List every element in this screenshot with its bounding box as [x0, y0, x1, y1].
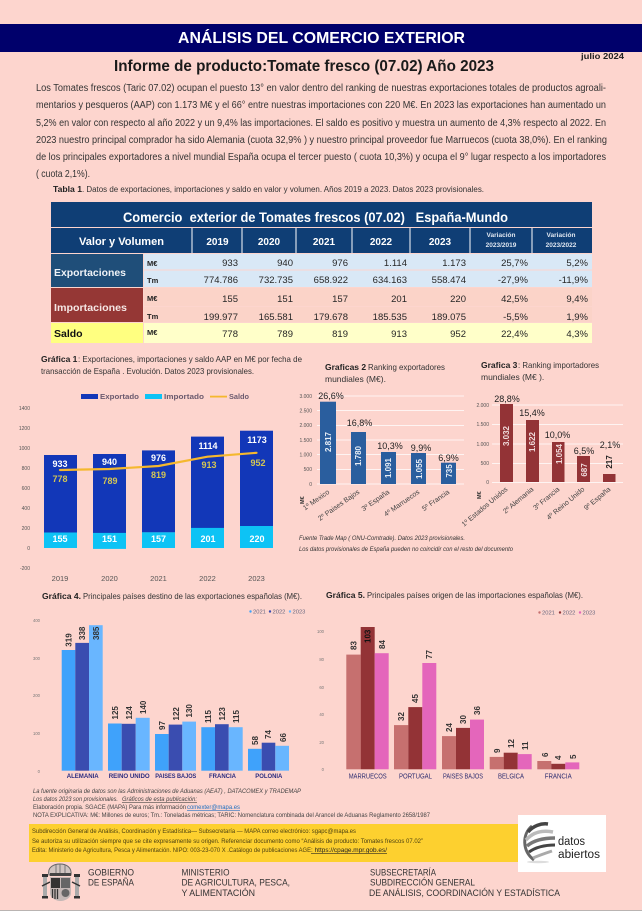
row: importaciones: 157 [332, 294, 348, 305]
row: exportaciones: 658.922 [314, 275, 348, 286]
chart 3 heading [481, 360, 599, 382]
y axis: 20 [319, 740, 325, 745]
bar values: 155 [52, 534, 68, 544]
row: importaciones: 165.581 [259, 312, 293, 323]
country labels: MARRUECOS [349, 774, 387, 780]
country labels: 9º España [583, 486, 612, 512]
footer: undersecretariat: DE ANÁLISIS, COORDINACIÓN Y ESTADÍSTICA [369, 888, 560, 898]
legend: 2022 [272, 610, 285, 616]
bar values [52, 435, 267, 544]
y axis: 80 [319, 657, 325, 662]
row: exportaciones: 933 [222, 258, 238, 269]
row: saldo: 4,3% [566, 329, 589, 340]
footer: government of Spain: DE ESPAÑA [88, 878, 134, 888]
grid and axis [476, 403, 623, 486]
exported bars [44, 431, 273, 533]
table column headers: 2020 [258, 237, 281, 248]
y axis: 200 [22, 526, 30, 532]
y axis: 300 [33, 656, 41, 661]
y axis: 60 [319, 685, 325, 690]
y axis: 1400 [19, 406, 30, 412]
table column headers: Variación [487, 232, 515, 239]
legend [249, 610, 305, 616]
legend: 2021 [542, 610, 555, 616]
bar values: 789 [102, 476, 118, 486]
country labels: 4º Reino Unido [546, 486, 586, 522]
header band with title [0, 24, 642, 52]
footer: government of Spain [88, 868, 134, 888]
row: exportaciones: 774.786 [204, 275, 238, 286]
chart 1 heading: transacción de España . Evolución. Datos 2023 provisionales. [41, 366, 254, 376]
table column headers: 2023/2019 [486, 242, 517, 249]
bars 2023 [89, 625, 289, 771]
table column headers: Valor y Volumen [79, 236, 164, 248]
icon: coat of arms of Spain [42, 864, 80, 901]
y axis: 800 [22, 466, 30, 472]
country labels: REINO UNIDO [109, 773, 150, 780]
country labels: 1º Mexico [302, 489, 331, 512]
country labels: PAISES BAJOS [155, 773, 197, 780]
y axis: 0 [38, 769, 41, 774]
row: importaciones: Tm [147, 312, 159, 321]
legend [538, 610, 595, 616]
footer: undersecretariat: SUBDIRECCIÓN GENERAL [370, 878, 475, 888]
table column headers: 2023/2022 [546, 242, 577, 249]
chart 4 heading: Principales países destino de las exportaciones españolas (M€). [83, 591, 302, 601]
datos abiertos logo [518, 815, 606, 872]
row: saldo [51, 323, 592, 343]
bar values: 4 [554, 755, 563, 760]
yellow contact band [29, 824, 518, 862]
legend: Importado [164, 392, 204, 401]
country labels: 3º España [361, 489, 391, 513]
bar values: 122 [172, 707, 181, 720]
bar values: 77 [425, 650, 434, 659]
bar values: 338 [78, 626, 87, 640]
bar values: 6 [541, 752, 550, 757]
country labels: PAISES BAJOS [443, 774, 483, 780]
x axis years [52, 574, 265, 583]
y axis: 0 [27, 546, 30, 552]
row: saldo: Saldo [54, 328, 83, 340]
bar values: 130 [185, 704, 194, 718]
bar values: 12 [507, 739, 516, 748]
bar values: 66 [279, 733, 288, 742]
row: saldo: 913 [391, 329, 407, 340]
chart 2 heading [325, 362, 445, 384]
bars [320, 402, 456, 484]
x axis years: 2019 [52, 574, 68, 583]
imported bars [44, 526, 273, 549]
row: importaciones: 201 [391, 294, 407, 305]
share labels: 26,6% [318, 391, 344, 401]
row: exportaciones: Tm [147, 276, 159, 285]
row: saldo: 778 [222, 329, 238, 340]
row: importaciones [51, 288, 592, 323]
country labels: 1º Estados Unidos [461, 486, 510, 528]
share labels: 2,1% [600, 440, 620, 450]
bar values [350, 629, 578, 760]
footer: undersecretariat [369, 868, 560, 898]
row: saldo: 952 [450, 329, 466, 340]
datos abiertos logo: datos [558, 836, 585, 848]
bar values: 9 [493, 748, 502, 753]
country labels [461, 486, 612, 528]
bar values: 1.780 [354, 445, 363, 466]
source note for charts 2 and 3: Los datos provisionales de España pueden no coincidir con el resto del documento [299, 546, 513, 553]
header band with title: ANÁLISIS DEL COMERCIO EXTERIOR [178, 30, 465, 47]
axis unit: M€ [300, 496, 306, 504]
row: saldo: M€ [147, 328, 158, 337]
intro text block: ( cuota 2,1%). [36, 169, 90, 180]
table: foreign trade data [51, 202, 592, 343]
source note for charts 2 and 3 [299, 535, 513, 553]
axis unit: M€ [477, 491, 483, 499]
footer: ministry: DE AGRICULTURA, PESCA, [182, 878, 290, 888]
y axis: 1000 [19, 446, 30, 452]
row: exportaciones: 634.163 [373, 275, 407, 286]
bar values: 385 [92, 626, 101, 640]
chart 1 heading: : Exportaciones, importaciones y saldo AAP en M€ por fecha de [78, 354, 302, 364]
y axis: 1200 [19, 426, 30, 432]
share labels [318, 391, 459, 463]
bars 2021 [62, 650, 262, 771]
country labels: 5º Francia [421, 489, 451, 513]
country labels: 4º Marruecos [383, 489, 422, 518]
row: importaciones: 199.977 [204, 312, 238, 323]
bar values: 103 [364, 629, 372, 643]
bar values: 32 [397, 712, 406, 721]
row: saldo: 789 [277, 329, 293, 340]
share labels: 16,8% [347, 418, 372, 428]
y axis [33, 618, 41, 774]
share labels: 6,5% [574, 446, 594, 456]
share labels: 10,3% [377, 441, 403, 451]
share labels: 6,9% [438, 453, 459, 463]
country labels [302, 489, 451, 523]
yellow contact band: Edita: Ministerio de Agricultura, Pesca y Alimentación. NIPO: 003-23-070 X .Catálogo de publicaciones AGE [32, 848, 311, 854]
table column headers [51, 228, 592, 253]
share labels: 15,4% [519, 408, 545, 418]
x axis years: 2020 [101, 574, 118, 583]
x axis years: 2021 [150, 574, 167, 583]
country labels: 3º Francia [532, 486, 561, 512]
table title row [51, 202, 592, 227]
bar values [64, 626, 288, 745]
grid and axis: 2.500 [299, 408, 312, 414]
row: exportaciones: 732.735 [259, 275, 293, 286]
grid and axis: 1.500 [299, 438, 312, 444]
chart 3: world importers ranking [461, 394, 623, 528]
x axis years: 2022 [199, 574, 216, 583]
y axis: 40 [319, 712, 325, 717]
legend: Saldo [229, 392, 249, 401]
intro text block: 2023 nuestro principal comprador ha sido Alemania (cuota 32,9% ) y nuestro principal proveedor fue Marruecos (cuota 38,0%). En el ranking [36, 135, 607, 146]
y axis: 400 [33, 618, 41, 623]
legend: 2021 [253, 610, 266, 616]
grid and axis: 0 [309, 482, 312, 488]
grid and axis: 0 [486, 480, 489, 486]
bar values: 58 [251, 736, 260, 745]
bar values: 115 [232, 710, 241, 723]
yellow contact band: Se autoriza su utilización siempre que se cite expresamente su origen. Referenciar documento como “Análisis de producto: Tomates frescos 07.02” [32, 839, 423, 845]
row: importaciones: 1,9% [566, 312, 589, 323]
legend: 2023 [582, 610, 595, 616]
chart 2 heading: mundiales (M€). [325, 374, 386, 384]
source notes: Elaboración propia. SGACE (MAPA) Para más información [33, 805, 186, 811]
share labels [494, 394, 620, 456]
chart 2 heading: Graficas 2 [325, 362, 366, 372]
bar values: 1114 [198, 441, 218, 451]
y axis [317, 629, 325, 772]
grid and axis: 1.000 [299, 452, 312, 458]
country labels: FRANCIA [545, 774, 572, 780]
y axis: 100 [317, 629, 325, 634]
footer: ministry [182, 868, 290, 898]
chart 4: export destinations [33, 610, 305, 780]
legend [81, 392, 249, 401]
row: exportaciones: -11,9% [559, 275, 589, 286]
bar values: 201 [200, 534, 216, 544]
bars 2021 [346, 655, 551, 769]
bar values: 1.054 [555, 443, 564, 464]
x axis years: 2023 [248, 574, 265, 583]
legend: 2023 [292, 610, 305, 616]
bar values: 1.622 [528, 431, 537, 452]
row: importaciones: 9,4% [566, 294, 589, 305]
row: importaciones: Importaciones [54, 302, 127, 314]
row: importaciones: 220 [450, 294, 466, 305]
chart 5 heading: Principales países origen de las importaciones españolas (M€). [367, 590, 583, 600]
source notes: NOTA EXPLICATIVA: M€: Millones de euros; Tm.: Toneladas métricas; TARIC: Nomenclatura combinada del Arancel de Aduanas Reglamento 2658/1987 [33, 813, 431, 819]
bars [500, 404, 616, 482]
chart 1 heading: Gráfica 1 [41, 354, 78, 364]
bar values: 123 [218, 707, 227, 720]
grid and axis: 500 [481, 461, 489, 467]
country labels: 2º Alemania [502, 486, 535, 515]
bars 2022 [361, 627, 565, 769]
bar values: 976 [151, 453, 166, 463]
country labels: BELGICA [498, 774, 524, 780]
grid and axis: 2.000 [476, 403, 489, 409]
share labels: 9,9% [411, 443, 431, 453]
balance line [60, 453, 256, 470]
yellow contact band: Subdirección General de Análisis, Coordinación y Estadística— Subsecretaría — MAPA correo electrónico: sgapc@mapa.es [32, 829, 356, 835]
bar values: 3.032 [502, 425, 511, 446]
grid and axis: 3.000 [299, 394, 312, 400]
y axis: 600 [22, 486, 30, 492]
row: exportaciones: M€ [147, 259, 158, 268]
country labels [67, 773, 283, 780]
chart 2: world exporters ranking [299, 391, 464, 523]
bars 2022 [75, 643, 275, 771]
bar values: 217 [605, 455, 614, 469]
row: importaciones: 155 [222, 294, 238, 305]
row: importaciones: 179.678 [314, 312, 348, 323]
bar values: 952 [250, 458, 266, 468]
chart 1: exports, imports and balance [19, 392, 273, 583]
row: exportaciones: 25,7% [501, 258, 529, 269]
bar values [502, 425, 614, 477]
grid and axis: 1.500 [476, 422, 489, 428]
bar values: 140 [139, 700, 148, 714]
row: exportaciones: 1.173 [442, 258, 466, 269]
datos abiertos logo: abiertos [558, 849, 600, 861]
bar values: 124 [125, 706, 134, 720]
country labels [349, 774, 572, 780]
share labels: 10,0% [545, 430, 570, 440]
table column headers: 2019 [206, 237, 229, 248]
row: importaciones: 189.075 [432, 312, 466, 323]
bar values: 2.817 [324, 431, 333, 452]
bar values: 157 [151, 534, 166, 544]
table column headers: 2022 [370, 237, 393, 248]
chart 3 heading: Grafica 3 [481, 360, 518, 370]
bar values: 940 [102, 457, 117, 467]
chart 5 heading: Gráfica 5. [326, 590, 365, 600]
bar values: 687 [580, 463, 589, 477]
row: importaciones: -5,5% [503, 312, 529, 323]
date: julio 2024 [580, 51, 624, 61]
legend: 2022 [562, 610, 575, 616]
grid and axis [299, 394, 464, 488]
chart 4 heading: Gráfica 4. [42, 591, 81, 601]
bar values: 45 [411, 694, 420, 703]
grid and axis: 500 [304, 467, 312, 473]
chart 3 heading: : Ranking importadores [518, 360, 599, 370]
row: importaciones: 151 [277, 294, 293, 305]
bar values: 97 [158, 721, 167, 730]
legend: Exportado [100, 392, 139, 401]
table title row: Comercio exterior de Tomates frescos (07.02) España-Mundo [123, 209, 508, 225]
row: exportaciones: -27,9% [498, 275, 529, 286]
bar values: 319 [64, 633, 74, 647]
source note for charts 2 and 3: Fuente Trade Map ( ONU-Comtrade). Datos 2023 provisionales. [299, 535, 465, 542]
row: saldo: 819 [332, 329, 348, 340]
table caption: . Datos de exportaciones, importaciones y saldo en valor y volumen. Años 2019 a 2023. Datos 2023 provisionales. [82, 185, 484, 194]
bars 2023 [375, 653, 579, 769]
y axis: 100 [33, 731, 41, 736]
y axis: 400 [22, 506, 30, 512]
row: saldo: 22,4% [501, 329, 529, 340]
country labels: ALEMANIA [67, 773, 99, 780]
intro text block [36, 83, 607, 180]
y axis: 0 [322, 767, 325, 772]
row: importaciones: 185.535 [373, 312, 407, 323]
bar values [324, 431, 454, 479]
table caption: Tabla 1 [53, 185, 83, 194]
footer: ministry: MINISTERIO [182, 868, 230, 878]
country labels: 2º Paises Bajos [317, 489, 362, 523]
footer: government of Spain: GOBIERNO [88, 868, 134, 878]
footer: ministry: Y ALIMENTACIÓN [182, 888, 255, 898]
source notes: La fuente originaria de datos son las Administraciones de Aduanas (AEAT) , DATACOMEX y TRADEMAP [33, 789, 301, 795]
bar values: 84 [378, 640, 387, 649]
y axis: -200 [20, 566, 30, 572]
chart 1 heading [41, 354, 302, 376]
bar values: 125 [111, 706, 120, 720]
row: exportaciones: 1.114 [384, 258, 407, 269]
bar values: 115 [204, 710, 213, 723]
country labels: FRANCIA [209, 773, 236, 780]
country labels: PORTUGAL [399, 774, 432, 780]
bar values: 83 [350, 641, 358, 650]
chart 2 heading: Ranking exportadores [368, 362, 445, 372]
row: exportaciones [51, 254, 592, 287]
table column headers: Variación [547, 232, 575, 239]
country labels: POLONIA [255, 773, 283, 780]
row: importaciones: 42,5% [501, 294, 529, 305]
chart 5: import origins [317, 610, 595, 780]
grid and axis: 2.000 [299, 423, 312, 429]
row: importaciones: M€ [147, 294, 158, 303]
bar values: 5 [569, 754, 578, 759]
row: exportaciones: 976 [332, 258, 348, 269]
bar values: 819 [151, 470, 166, 480]
chart 3 heading: mundiales (M€ ). [481, 372, 544, 382]
bar values: 151 [102, 534, 117, 544]
report subtitle: Informe de producto:Tomate fresco (07.02) Año 2023 [114, 58, 494, 75]
bar values: 74 [264, 730, 273, 739]
table column headers: 2021 [313, 237, 336, 248]
source notes: comexter@mapa.es [187, 805, 240, 811]
grid and axis: 1.000 [476, 442, 489, 448]
bar values: 1173 [247, 435, 267, 445]
bar values: 1.091 [384, 457, 393, 478]
row: exportaciones: 940 [277, 258, 293, 269]
bar values: 30 [459, 715, 468, 724]
source notes [33, 789, 431, 819]
y axis [19, 406, 30, 572]
bar values: 933 [52, 459, 68, 469]
globe icon [525, 824, 555, 863]
bar values: 220 [249, 534, 265, 544]
row: exportaciones: 558.474 [432, 275, 466, 286]
bar values: 735 [445, 464, 454, 478]
row: exportaciones: Exportaciones [54, 267, 126, 279]
bar values: 778 [52, 474, 68, 484]
intro text block: Los Tomates frescos (Taric 07.02) ocupan el puesto 13° en valor dentro del ranking de nuestras exportaciones totales de productos agroali- [36, 83, 606, 94]
bar values: 11 [521, 741, 530, 750]
bar values: 24 [445, 723, 454, 732]
bar values: 1.055 [415, 458, 424, 479]
row: exportaciones: 5,2% [566, 258, 589, 269]
y axis: 200 [33, 693, 41, 698]
table column headers: 2023 [429, 237, 452, 248]
bar values: 36 [473, 706, 482, 715]
source notes: Gráficos de esta publicación: [122, 797, 197, 803]
footer: undersecretariat: SUBSECRETARÍA [370, 868, 436, 878]
source notes: Los datos 2023 son provisionales. [33, 797, 118, 803]
bar values: 913 [201, 460, 217, 470]
share labels: 28,8% [494, 394, 520, 404]
yellow contact band: : https://cpage.mpr.gob.es/ [311, 848, 387, 854]
